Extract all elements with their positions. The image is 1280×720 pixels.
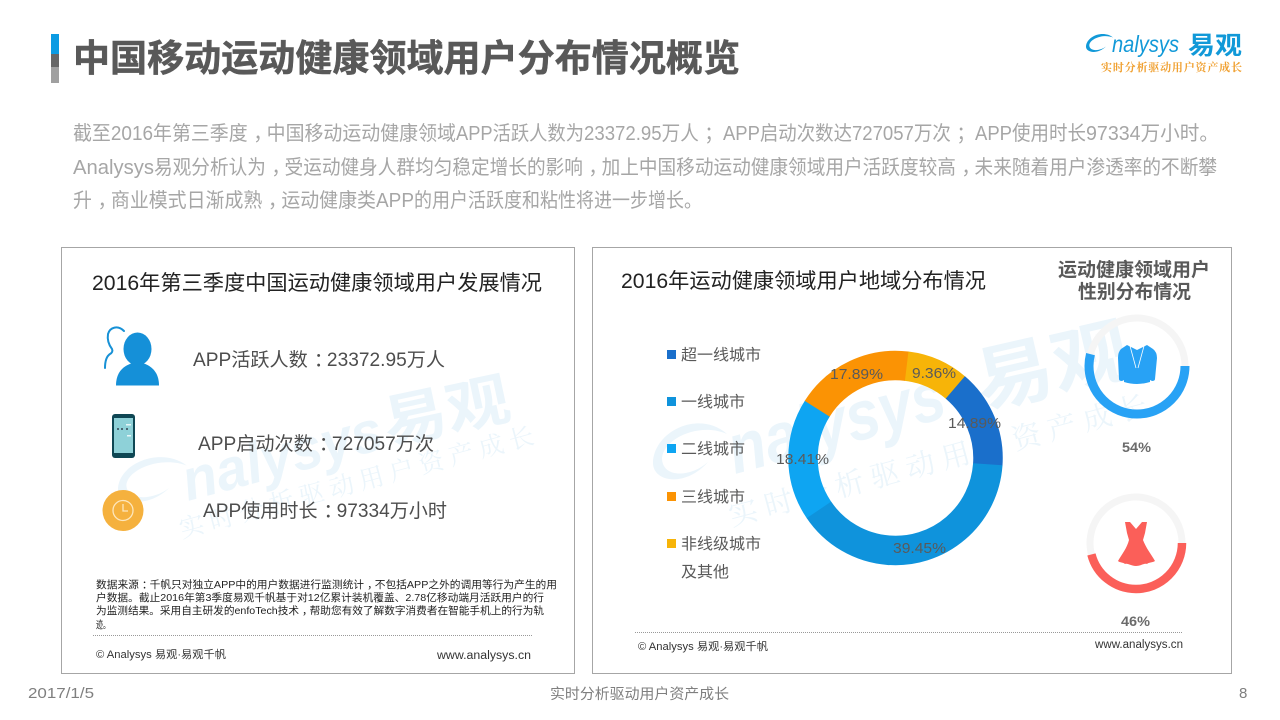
left panel footer bbox=[93, 636, 532, 662]
icon: dress bbox=[1118, 522, 1155, 566]
panel: regional and gender distribution bbox=[592, 248, 1232, 674]
legend: city tiers bbox=[667, 346, 761, 581]
intro text bbox=[73, 122, 1219, 212]
intro text: 升，商业模式日渐成熟，运动健康类 bbox=[73, 189, 376, 212]
intro text: 的用户活跃度和粘性将进一步增长。 bbox=[414, 189, 702, 212]
left panel footer: www.analysys.cn bbox=[436, 650, 531, 662]
donut value labels: 39.45% bbox=[893, 540, 946, 557]
watermark: right: 易观 bbox=[968, 311, 1138, 424]
gender heading: 性别分布情况 bbox=[1078, 281, 1191, 303]
data source note: 迹。 bbox=[96, 618, 110, 631]
intro text: 易观分析认为，受运动健身人群均匀稳定增长的影响，加上中国移动运动健康领域用户活跃度较高，未来随着用户渗透率的不断攀 bbox=[154, 156, 1217, 179]
female gauge bbox=[1090, 497, 1182, 589]
icon: clock bbox=[102, 490, 144, 531]
male gauge bbox=[1089, 318, 1185, 414]
panel heading: regional distribution: 2016年运动健康领域用户地域分布情况 bbox=[621, 270, 986, 293]
legend: city tiers: 非线级城市 bbox=[681, 535, 761, 553]
icon: users bbox=[105, 327, 159, 386]
data source note: 户数据。截止2016年第3季度易观千帆基于对12亿累计装机覆盖、2.78亿移动端月活跃用户的行 bbox=[96, 591, 545, 604]
stat: launches: APP启动次数 ：727057万次 bbox=[198, 433, 434, 455]
left panel footer: © Analysys 易观·易观千帆 bbox=[96, 647, 226, 661]
watermark: right: 实时分析驱动用户资产成长 bbox=[725, 389, 1151, 533]
watermark: right: nalysys bbox=[719, 356, 953, 488]
male value: 54% bbox=[1122, 439, 1152, 455]
logo bbox=[1086, 31, 1242, 74]
donut value labels bbox=[776, 365, 1001, 557]
footer: date: 2017/1/5 bbox=[28, 685, 94, 702]
stat: active users: APP活跃人数 ：23372.95万人 bbox=[193, 349, 445, 371]
intro text: 截至2016年第三季度，中国移动运动健康领域 bbox=[73, 122, 456, 145]
data source note bbox=[96, 578, 557, 631]
donut value labels: 18.41% bbox=[776, 451, 829, 468]
donut value labels: 14.89% bbox=[948, 415, 1001, 432]
logo: nalysys bbox=[1112, 31, 1179, 57]
legend: city tiers: 及其他 bbox=[681, 563, 729, 581]
watermark: left: nalysys bbox=[175, 398, 389, 514]
right panel footer bbox=[635, 632, 1183, 653]
logo: 实时分析驱动用户资产成长 bbox=[1101, 60, 1242, 74]
watermark: left: 实时分析驱动用户资产成长 bbox=[176, 422, 537, 544]
logo: 易观 bbox=[1188, 32, 1242, 60]
watermark: left bbox=[118, 367, 537, 544]
watermark: left: 易观 bbox=[377, 367, 516, 457]
title: 中国移动运动健康领域用户分布情况概览 bbox=[73, 38, 740, 79]
panel: user development bbox=[62, 248, 574, 674]
donut value labels: 9.36% bbox=[912, 365, 956, 382]
right panel footer: © Analysys 易观·易观千帆 bbox=[638, 639, 768, 653]
intro text: 97334万小时。 bbox=[1086, 122, 1219, 145]
donut value labels: 17.89% bbox=[830, 366, 883, 383]
donut chart bbox=[765, 328, 1026, 588]
female value: 46% bbox=[1121, 613, 1151, 629]
intro text: 23372.95万人； bbox=[584, 122, 723, 145]
legend: city tiers: 超一线城市 bbox=[681, 346, 761, 364]
footer: page number: 8 bbox=[1239, 685, 1247, 702]
intro text: Analysys bbox=[73, 157, 154, 179]
intro text: APP活跃人数为 bbox=[456, 122, 584, 145]
footer: tagline: 实时分析驱动用户资产成长 bbox=[550, 686, 730, 703]
intro text: APP使用时长 bbox=[975, 122, 1086, 145]
gender heading bbox=[1058, 258, 1210, 303]
intro text: 727057万次； bbox=[852, 122, 975, 145]
icon: suit bbox=[1118, 345, 1157, 384]
title accent bar bbox=[51, 34, 59, 83]
gender heading: 运动健康领域用户 bbox=[1058, 258, 1210, 281]
intro text: APP bbox=[376, 190, 414, 212]
legend: city tiers: 二线城市 bbox=[681, 440, 745, 458]
data source note: 为监测结果。采用自主研发的enfoTech技术 ，帮助您有效了解数字消费者在智能手机上的行为轨 bbox=[96, 604, 545, 617]
data source note: 数据来源 ：千帆只对独立APP中的用户数据进行监测统计 ，不包括APP之外的调用等行为产生的用 bbox=[96, 578, 557, 591]
intro text: APP启动次数达 bbox=[723, 122, 852, 145]
stat: usage time: APP使用时长 ：97334万小时 bbox=[203, 500, 447, 522]
panel heading: user development: 2016年第三季度中国运动健康领域用户发展情况 bbox=[92, 272, 542, 295]
icon: phone bbox=[112, 414, 135, 458]
legend: city tiers: 一线城市 bbox=[681, 393, 745, 411]
right panel footer: www.analysys.cn bbox=[1094, 639, 1183, 651]
legend: city tiers: 三线城市 bbox=[681, 488, 745, 506]
watermark: right bbox=[653, 311, 1151, 533]
